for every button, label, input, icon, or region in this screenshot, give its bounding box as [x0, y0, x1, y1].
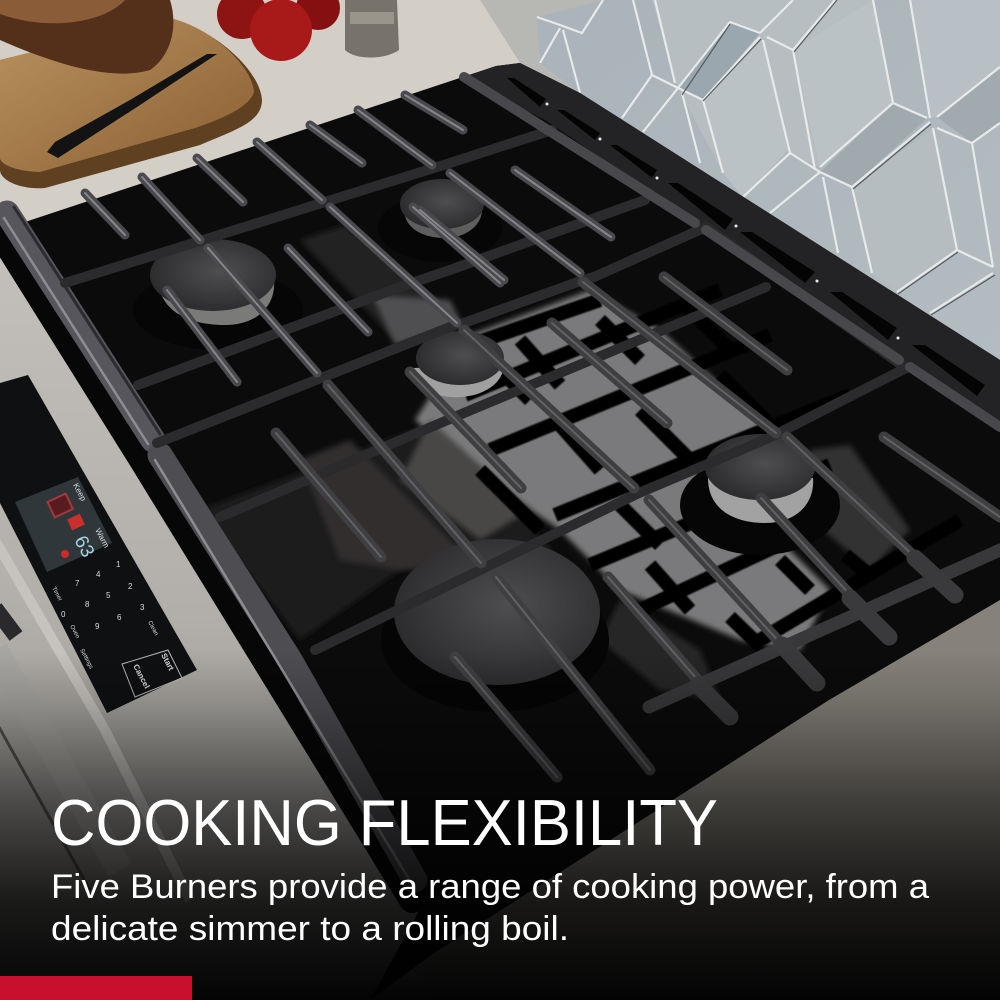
description: [51, 868, 929, 948]
rear vent strip: [462, 63, 1000, 425]
control panel: [0, 375, 197, 713]
title: COOKING FLEXIBILITY: [51, 786, 718, 859]
control panel: 1: [116, 560, 121, 569]
control panel: 63: [70, 532, 98, 561]
control panel: Keep: [71, 482, 88, 503]
tomatoes and pepper mill: [217, 0, 399, 61]
control panel: Settings: [78, 648, 94, 670]
red accent bar: [0, 976, 192, 1000]
description: Five Burners provide a range of cooking power, from a: [51, 868, 929, 906]
burner: rear left: [133, 239, 303, 350]
left side rail of cooktop: [0, 207, 415, 900]
control panel: 3: [140, 603, 145, 612]
burner: large front: [381, 539, 609, 712]
burner: centre simmer: [413, 331, 504, 397]
control panel: 5: [106, 591, 111, 600]
control panel: 0: [61, 610, 66, 619]
control panel: 4: [96, 570, 101, 579]
oven door trim and handle: [0, 540, 190, 900]
rear rail: [464, 77, 1000, 427]
control panel: Timer: [50, 586, 63, 602]
front rail: [649, 550, 1000, 707]
glass reflections: [200, 225, 960, 700]
front finger bars: [276, 277, 1000, 777]
control panel: Oven: [68, 624, 80, 640]
cross bars: [65, 130, 906, 650]
tile backsplash: [480, 0, 1000, 362]
control panel: 7: [75, 579, 80, 588]
burner: rear centre: [378, 179, 502, 262]
cast iron grates: [65, 77, 1000, 777]
control panel: Cancel: [131, 663, 151, 690]
lower right counter: [360, 560, 1000, 1000]
control panel: Start: [159, 652, 176, 672]
control panel: Warm: [93, 527, 111, 550]
thick finger ends: [698, 558, 955, 717]
description: delicate simmer to a rolling boil.: [51, 910, 569, 948]
cutting board with bread and knife: [0, 0, 262, 188]
control panel: Clean: [146, 620, 159, 637]
stainless steel range front: [0, 225, 425, 1000]
soft dark gradient overlay: [0, 650, 1000, 1000]
control panel: 2: [128, 582, 133, 591]
rear finger bars: [85, 95, 611, 382]
control panel: 8: [85, 600, 90, 609]
control panel: 6: [117, 613, 122, 622]
burner: right: [680, 434, 840, 555]
control panel: 9: [95, 622, 100, 631]
